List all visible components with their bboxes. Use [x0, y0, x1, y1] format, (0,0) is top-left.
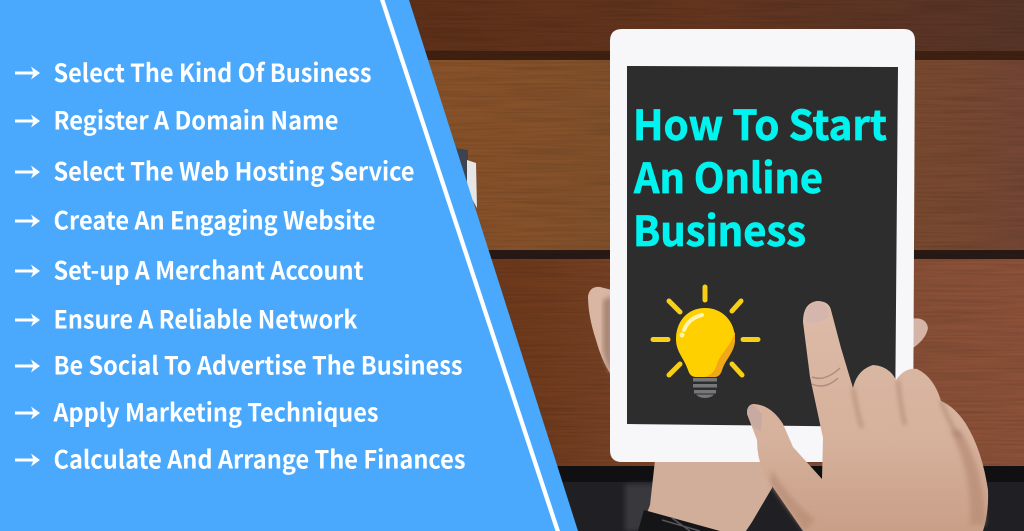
bulb rays: [653, 287, 758, 375]
step 2: Register A Domain Name: [54, 102, 338, 138]
hand shading: [770, 430, 985, 531]
icon: light bulb: [653, 287, 758, 398]
step 8: Apply Marketing Techniques: [53, 394, 378, 430]
tablet: [610, 29, 915, 462]
left supporting hand and wrist: [588, 287, 928, 531]
step 4: Create An Engaging Website: [54, 202, 376, 238]
tablet body: [610, 29, 915, 462]
bulb screw base: [693, 378, 717, 398]
steps list: [15, 54, 466, 476]
right hand touching the screen: [747, 301, 988, 531]
wristwatch: [638, 510, 720, 531]
blue panel: [0, 0, 578, 531]
screen heading: An Online: [633, 145, 823, 205]
small object behind the panel: [455, 148, 477, 208]
screen heading: [633, 92, 887, 258]
step 7: Be Social To Advertise The Business: [54, 346, 462, 382]
screen heading: How To Start: [633, 92, 887, 152]
fingernail: [806, 302, 829, 323]
step 1: Select The Kind Of Business: [54, 54, 372, 90]
step 3: Select The Web Hosting Service: [54, 152, 414, 188]
step 6: Ensure A Reliable Network: [54, 300, 358, 336]
screen heading: Business: [633, 198, 806, 258]
dark sleeve area below the table: [540, 466, 1024, 531]
step 9: Calculate And Arrange The Finances: [54, 440, 466, 476]
white diagonal stripe: [380, 0, 560, 531]
hand shape: [747, 301, 988, 531]
tablet screen: [627, 66, 898, 427]
knuckle creases: [812, 368, 840, 386]
wood table background: [380, 0, 1024, 531]
thumbnail: [747, 405, 762, 431]
step 5: Set-up A Merchant Account: [54, 252, 364, 288]
bulb glass: [676, 308, 735, 377]
